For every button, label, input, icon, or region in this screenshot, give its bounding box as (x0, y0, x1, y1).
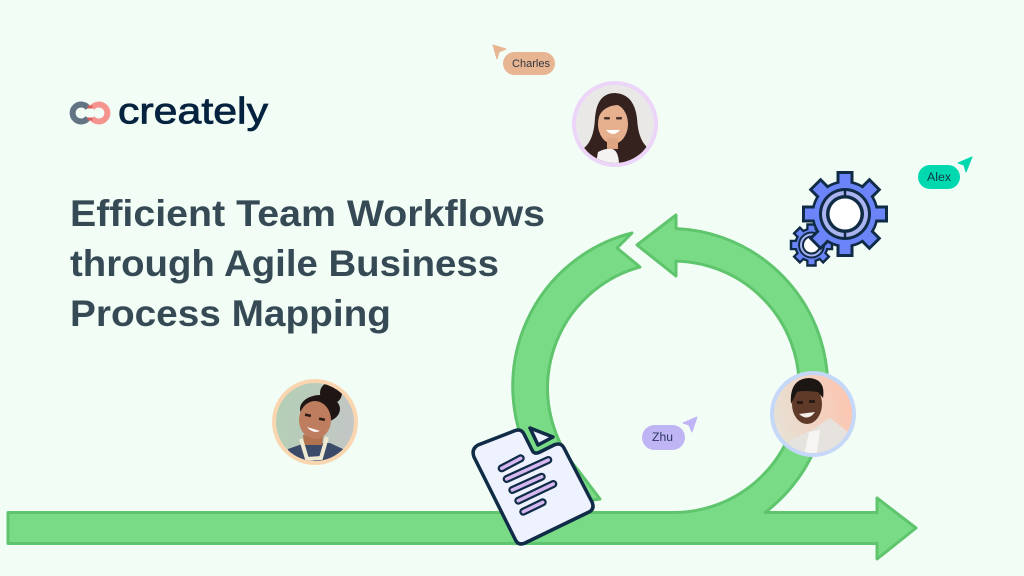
arrow: loop left tail (513, 233, 640, 505)
document fold (530, 428, 553, 445)
logo: creately (73, 90, 269, 132)
document text lines (502, 458, 553, 512)
logo wordmark: creately (118, 90, 269, 132)
icon: large gear (804, 172, 886, 256)
arrow: main line with loop (8, 215, 916, 559)
icon: document (473, 428, 593, 544)
avatar: woman left (274, 381, 356, 465)
title: through Agile Business (70, 243, 499, 284)
cursor label: Alex (918, 157, 972, 189)
cursor label: Alex: Alex (927, 172, 951, 184)
icon: small gear (791, 224, 832, 266)
title (70, 193, 545, 334)
avatar: woman top (574, 83, 656, 165)
cursor label: Charles (493, 45, 555, 75)
icon: logo rings (73, 104, 107, 122)
cursor label: Charles: Charles (512, 58, 550, 70)
title: Process Mapping (70, 293, 391, 334)
cursor label: Zhu (642, 417, 697, 450)
cursor label: Zhu: Zhu (652, 432, 673, 444)
title: Efficient Team Workflows (70, 193, 545, 234)
avatar: man right (772, 373, 855, 460)
document sheet (473, 430, 593, 544)
